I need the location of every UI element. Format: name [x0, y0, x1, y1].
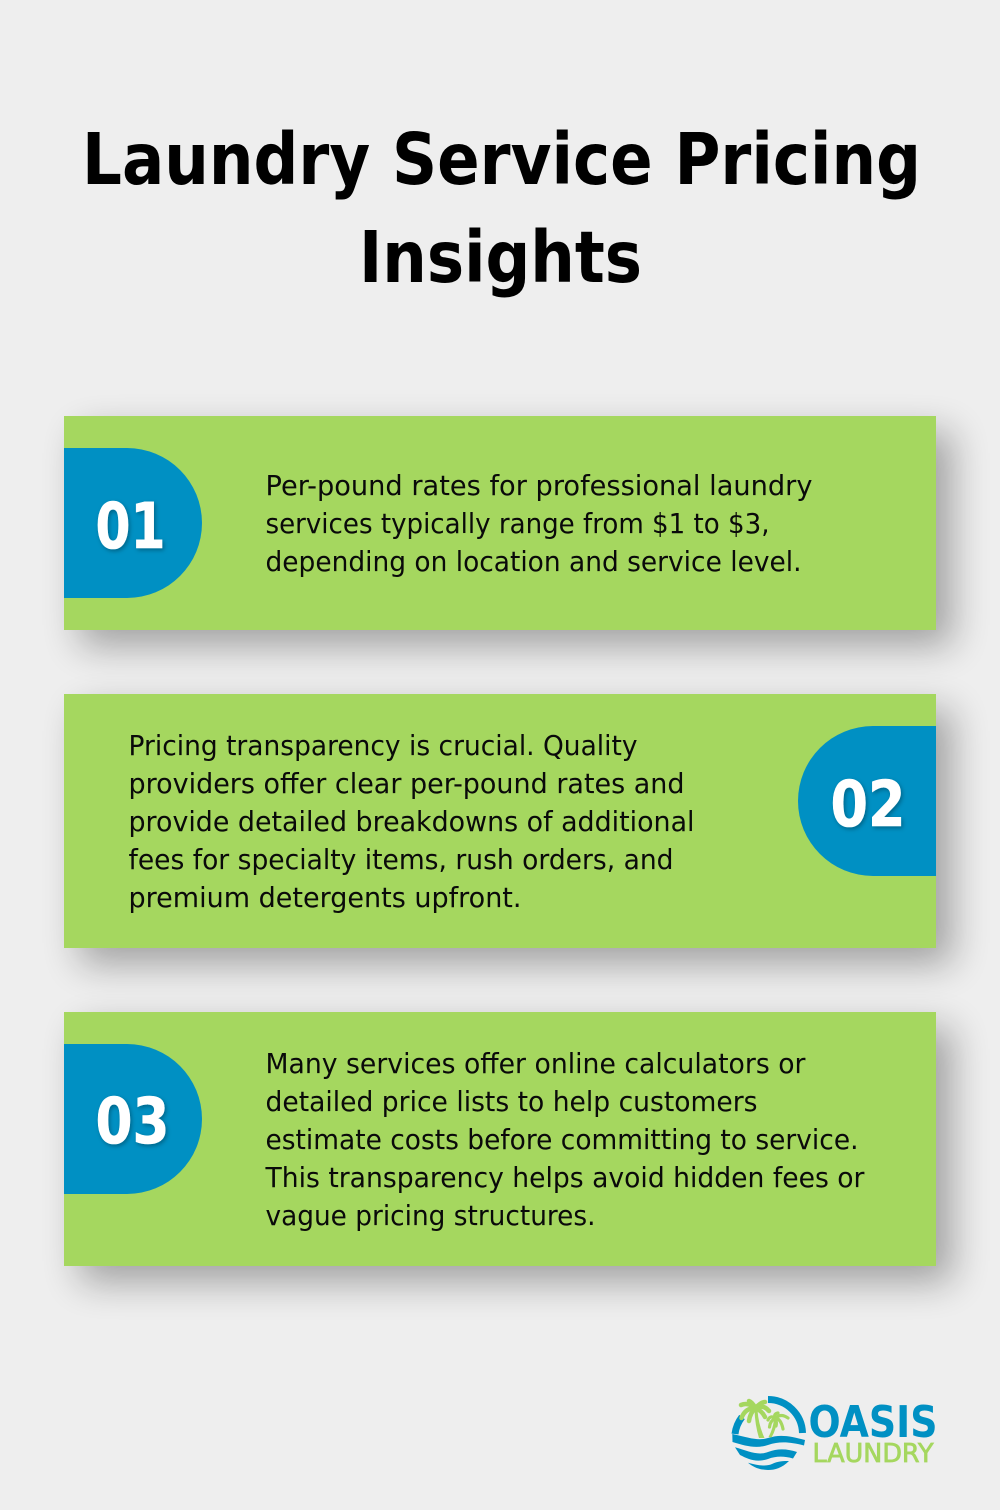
- text block 02: premium detergents upfront.: [128, 882, 522, 914]
- title: [82, 118, 921, 299]
- text block 01: services typically range from $1 to $3,: [266, 508, 770, 540]
- text block 03: estimate costs before committing to service.: [266, 1124, 858, 1156]
- badge 01: 01: [96, 490, 166, 563]
- text block 03: vague pricing structures.: [266, 1200, 596, 1232]
- wordmark: OASIS: [808, 1397, 938, 1448]
- panel: card 02: [64, 694, 952, 964]
- badge 03: 03: [96, 1085, 170, 1158]
- text block 02: [128, 730, 694, 914]
- text block 02: providers offer clear per-pound rates and: [128, 768, 684, 800]
- text block 01: Per-pound rates for professional laundry: [266, 470, 812, 502]
- panel: card 03: [64, 1012, 952, 1282]
- badge 01: [64, 448, 202, 598]
- text block 01: [266, 470, 812, 578]
- wordmark: [808, 1397, 938, 1469]
- title: Insights: [359, 216, 642, 299]
- text block 03: Many services offer online calculators or: [266, 1048, 806, 1080]
- text block 03: [265, 1048, 865, 1232]
- text block 01: depending on location and service level.: [266, 546, 802, 578]
- panel: card 01: [64, 416, 952, 646]
- text block 03: This transparency helps avoid hidden fees or: [265, 1162, 865, 1194]
- text block 03: detailed price lists to help customers: [266, 1086, 758, 1118]
- text block 02: provide detailed breakdowns of additional: [128, 806, 694, 838]
- logo: Oasis Laundry: [732, 1397, 938, 1470]
- badge 02: 02: [830, 768, 906, 841]
- badge 03: [64, 1044, 202, 1194]
- wordmark: LAUNDRY: [812, 1439, 934, 1469]
- text block 02: Pricing transparency is crucial. Quality: [128, 730, 638, 762]
- text block 02: fees for specialty items, rush orders, and: [128, 844, 674, 876]
- icon: palm and waves: [732, 1400, 805, 1470]
- badge 02: [798, 726, 936, 876]
